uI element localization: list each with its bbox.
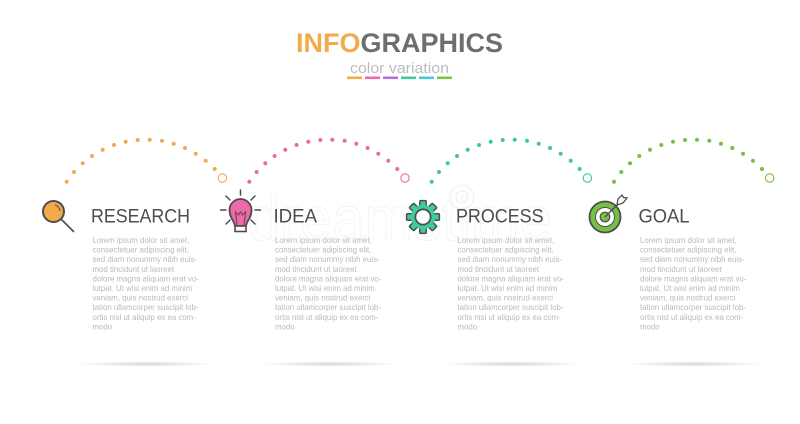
text: goal body: ortis nisl ut aliquip ex ea com- — [640, 313, 744, 322]
text: goal body: mod tincidunt ut laoreet — [640, 265, 722, 274]
icon: target with arrow — [590, 195, 627, 232]
subtitle: color variation — [350, 60, 449, 77]
watermark: dreamstime — [248, 185, 552, 254]
heading: goal: GOAL — [638, 206, 690, 228]
text: research body: sed diam nonummy nibh euis- — [92, 255, 198, 264]
text: research body: veniam, quis nostrud exerci — [92, 294, 188, 303]
heading: research: RESEARCH — [91, 206, 190, 228]
icon: light bulb — [220, 190, 260, 232]
text: process body: veniam, quis nostrud exerci — [458, 294, 553, 303]
text: process body: ortis nisl ut aliquip ex ea com- — [458, 313, 561, 322]
text: idea body: modo — [275, 322, 295, 331]
text: process body: tation ullamcorper suscipit lob- — [458, 303, 564, 312]
text: goal body: veniam, quis nostrud exerci — [640, 294, 736, 303]
dotted arc: idea — [247, 138, 409, 184]
text: research body: consectetuer adipiscing elit, — [92, 246, 189, 255]
text: idea body: dolore magna aliquam erat vo- — [275, 274, 382, 283]
text: goal body: lutpat. Ut wisi enim ad minim — [640, 284, 740, 293]
text: research body: Lorem ipsum dolor sit amet, — [92, 236, 189, 245]
text: idea body: lutpat. Ut wisi enim ad minim — [275, 284, 375, 293]
text: idea body: mod tincidunt ut laoreet — [275, 265, 357, 274]
text: idea body: tation ullamcorper suscipit lob- — [275, 303, 381, 312]
text: idea body: ortis nisl ut aliquip ex ea com- — [275, 313, 379, 322]
text: research body: mod tincidunt ut laoreet — [92, 265, 175, 274]
text: goal body: sed diam nonummy nibh euis- — [640, 255, 745, 264]
text: research body: tation ullamcorper suscipit lob- — [92, 303, 199, 312]
title: INFOGRAPHICS — [296, 28, 503, 58]
dotted arc: goal — [612, 138, 774, 184]
text: research body: ortis nisl ut aliquip ex ea com- — [92, 313, 196, 322]
text: process body: consectetuer adipiscing elit, — [458, 246, 554, 255]
text: idea body: Lorem ipsum dolor sit amet, — [275, 236, 372, 245]
text: process body: mod tincidunt ut laoreet — [458, 265, 540, 274]
shadow — [260, 361, 400, 367]
text: research body: modo — [92, 322, 113, 331]
shadow — [624, 361, 764, 367]
dotted arc: research — [65, 138, 227, 184]
shadow — [442, 361, 582, 367]
text: goal body: consectetuer adipiscing elit, — [640, 246, 736, 255]
heading: idea: IDEA — [274, 206, 317, 228]
text: process body: lutpat. Ut wisi enim ad minim — [458, 284, 558, 293]
text: idea body: sed diam nonummy nibh euis- — [275, 255, 380, 264]
icon: magnifier — [43, 201, 74, 232]
text: goal body: modo — [640, 322, 660, 331]
text: process body: modo — [458, 322, 478, 331]
text: research body: dolore magna aliquam erat vo- — [92, 274, 199, 283]
dotted arc: process — [430, 138, 592, 184]
text: process body: sed diam nonummy nibh euis- — [458, 255, 563, 264]
text: goal body: tation ullamcorper suscipit lob- — [640, 303, 746, 312]
text: goal body: dolore magna aliquam erat vo- — [640, 274, 747, 283]
color legend bars — [347, 76, 452, 79]
text: research body: lutpat. Ut wisi enim ad minim — [92, 284, 193, 293]
text: process body: dolore magna aliquam erat vo- — [458, 274, 564, 283]
shadow — [77, 361, 217, 367]
heading: process: PROCESS — [456, 206, 544, 228]
text: goal body: Lorem ipsum dolor sit amet, — [640, 236, 737, 245]
text: idea body: consectetuer adipiscing elit, — [275, 246, 371, 255]
text: idea body: veniam, quis nostrud exerci — [275, 294, 371, 303]
text: process body: Lorem ipsum dolor sit amet, — [458, 236, 554, 245]
icon: gear — [407, 201, 439, 233]
